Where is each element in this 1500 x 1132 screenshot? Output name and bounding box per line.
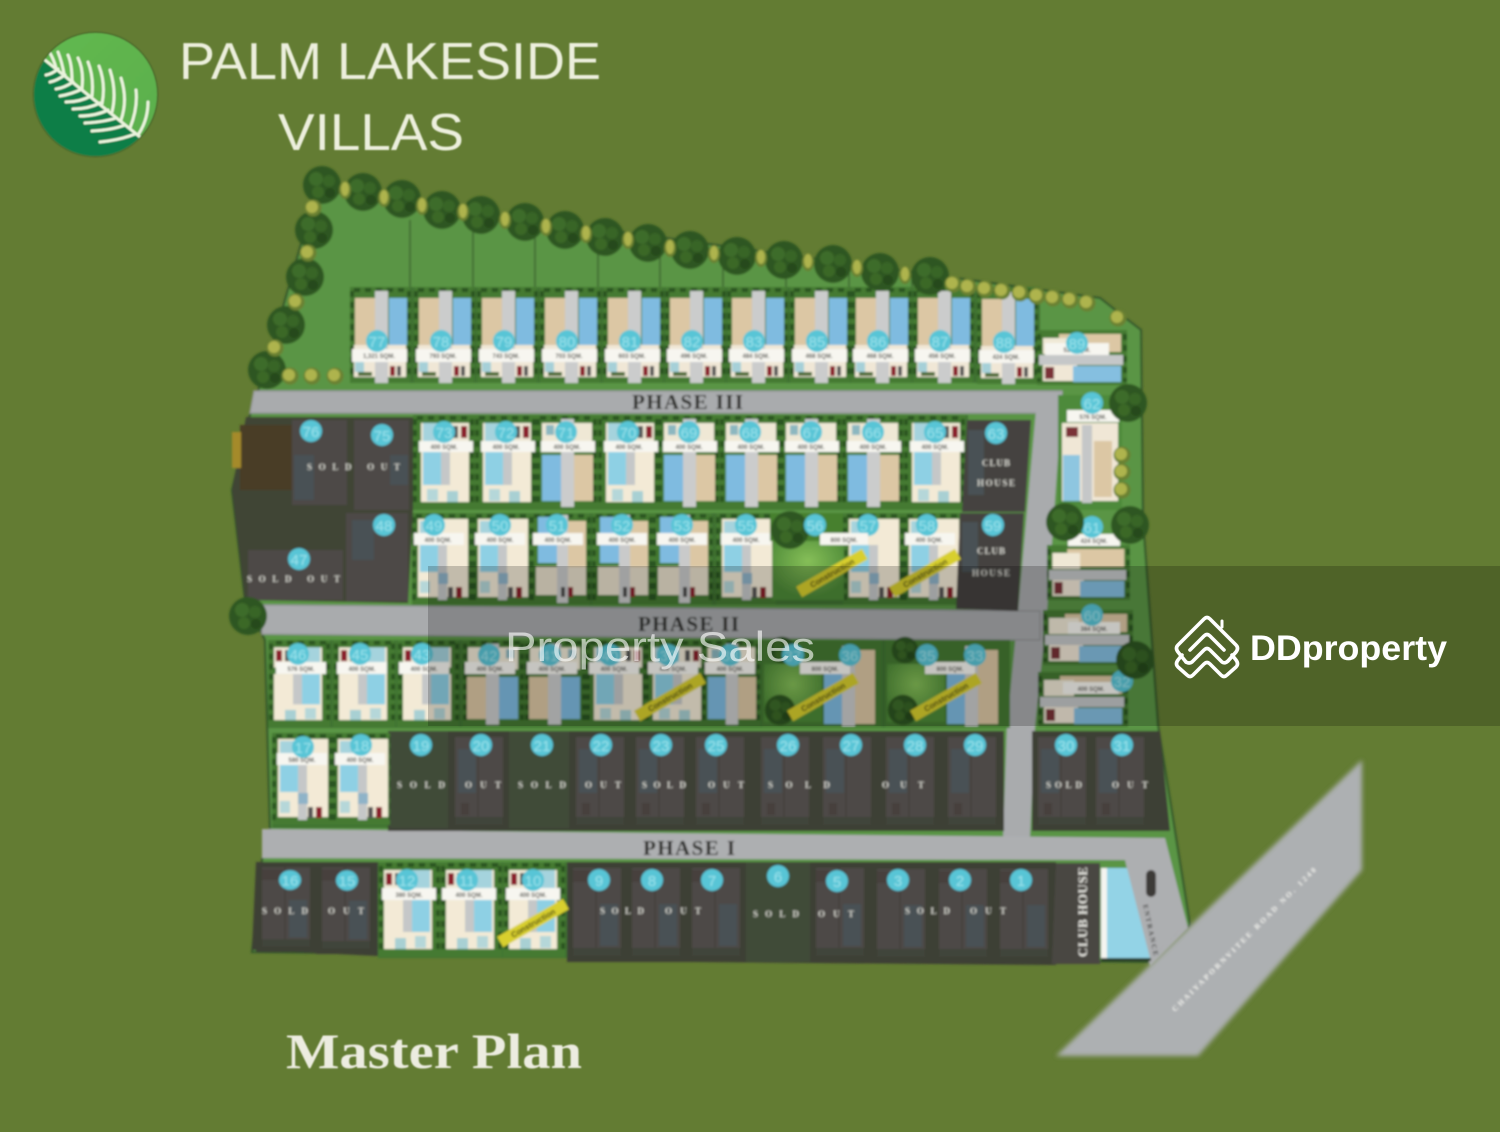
plot 80 — [540, 287, 600, 383]
plot 87: 87 — [932, 334, 948, 351]
plot 57: 57 — [860, 518, 876, 535]
plot 39: 400 SQM. — [659, 667, 687, 673]
plot 11: 11 — [459, 873, 475, 890]
plot 79: 743 SQM. — [492, 354, 520, 360]
entrance label: ENTRANCE — [1141, 904, 1160, 957]
plot 23: 23 — [653, 738, 669, 755]
plot 65 — [904, 415, 966, 510]
plot 88: 424 SQM. — [992, 355, 1020, 361]
plot 61: 61 — [1084, 520, 1100, 537]
plot 78 — [414, 287, 474, 383]
watermark text: Property Sales — [505, 623, 815, 670]
plot 52: 52 — [614, 518, 630, 535]
plot 36 and 37 with lawn: 36 — [842, 648, 858, 665]
plot 81 — [603, 287, 663, 383]
plot 12: 12 — [399, 873, 415, 890]
plot 49: 400 SQM. — [424, 538, 452, 544]
plot 56 lawn: 56 — [807, 518, 823, 535]
plot 17: 580 SQM. — [288, 758, 316, 764]
plot 55: 400 SQM. — [732, 538, 760, 544]
sold out labels — [397, 780, 1148, 790]
plot 30: 30 — [1058, 738, 1074, 755]
plot 70: 70 — [620, 425, 636, 442]
dark block — [232, 417, 413, 603]
dark row bases — [252, 731, 1160, 965]
plot 53: 53 — [674, 518, 690, 535]
plot 60: 384 SQM. — [1080, 627, 1108, 633]
construction tag — [910, 673, 982, 721]
plot 2 — [933, 863, 993, 963]
sold out labels — [262, 906, 1006, 919]
plot 32: 32 — [1114, 674, 1130, 691]
plot 43: 400 SQM. — [410, 667, 438, 673]
plot 39 — [645, 640, 707, 727]
plot 38 — [702, 640, 761, 727]
plot 77: 77 — [369, 334, 385, 351]
bottom row plots — [256, 862, 1318, 1013]
plot 15: 15 — [339, 874, 355, 890]
plot 86 — [851, 287, 911, 383]
plot 33 and 35 with lawn: 35 — [919, 648, 935, 665]
plot 7 — [686, 862, 746, 962]
sold out labels: OUT — [585, 780, 621, 790]
plot 82 — [665, 287, 725, 383]
club house 59: 59 — [985, 518, 1001, 535]
construction tag: Construction — [808, 557, 856, 590]
sold out labels: OUT — [882, 780, 924, 790]
plot 5 — [810, 862, 870, 962]
plot 72: 72 — [498, 425, 514, 442]
plot 40 — [586, 640, 648, 727]
phase III label: PHASE III — [632, 390, 743, 414]
plot 3 — [871, 863, 931, 963]
plot 18: 18 — [353, 738, 369, 755]
plot 61: 424 SQM. — [1080, 539, 1108, 545]
site lawn — [232, 190, 1190, 962]
plot boundary lines — [410, 220, 912, 290]
title — [179, 33, 601, 162]
club house 59 — [956, 513, 1024, 611]
sold out labels: OUT — [708, 780, 744, 790]
plot 11: 400 SQM. — [455, 893, 483, 899]
plot 36 and 37 with lawn: 800 SQM. — [811, 667, 839, 673]
plot 25: 25 — [708, 738, 724, 755]
plot 28 — [880, 731, 940, 831]
plot 67: 67 — [803, 425, 819, 442]
plot 73: 400 SQM. — [430, 445, 458, 451]
plot 83: 83 — [746, 334, 762, 351]
top row plots — [350, 287, 1127, 385]
right column plots — [1038, 392, 1133, 727]
plot 66: 400 SQM. — [859, 445, 887, 451]
plot 61 — [1047, 516, 1130, 600]
sold out labels: OUT — [328, 906, 364, 916]
plot 60 — [1043, 604, 1133, 665]
plot 32: 400 SQM. — [1077, 687, 1105, 693]
club house 63: 63 — [988, 426, 1004, 443]
plot 42 — [462, 640, 524, 727]
sold out labels: OUT — [818, 909, 854, 919]
plot 9: 9 — [595, 873, 603, 890]
title line 2: VILLAS — [278, 104, 464, 162]
plot 45 — [333, 640, 395, 727]
plot 19 empty — [390, 731, 448, 828]
logo: palm leaf — [32, 32, 159, 158]
sold out labels: OUT — [970, 906, 1006, 916]
plot 56 lawn — [770, 511, 868, 600]
plot 58: 400 SQM. — [915, 538, 943, 544]
plot 86: 468 SQM. — [866, 354, 894, 360]
road: vertical connector — [1003, 391, 1062, 838]
plot 70 — [598, 415, 660, 510]
plot 71: 400 SQM. — [553, 445, 581, 451]
club house 63: CLUB — [982, 458, 1010, 468]
plot 52: 400 SQM. — [608, 538, 636, 544]
plot 28: 28 — [907, 738, 923, 755]
sold out text: SOLD OUT — [307, 462, 400, 472]
plot 75: 75 — [374, 428, 390, 445]
plot 26: 26 — [780, 738, 796, 755]
plot 41: 400 SQM. — [538, 667, 566, 673]
plot 78: 78 — [433, 334, 449, 351]
sold out labels: SOLD — [518, 780, 566, 790]
sold out labels: SOLD — [768, 780, 830, 790]
DDproperty logo wordmark: DDproperty — [1250, 629, 1448, 668]
plot 25 — [690, 731, 750, 831]
plot 68: 400 SQM. — [737, 445, 765, 451]
fifth row plots — [272, 731, 1170, 831]
row base hedges — [268, 287, 1040, 958]
plot 81: 81 — [622, 334, 638, 351]
plot 76 — [300, 420, 322, 442]
sold out labels: SOLD — [753, 909, 800, 919]
construction tag: Construction — [901, 557, 949, 590]
plot 66 — [842, 415, 904, 510]
plot 27 — [817, 731, 877, 831]
plot 8: 8 — [648, 873, 656, 890]
plot 56 lawn: 800 SQM. — [830, 538, 858, 544]
sold out labels: SOLD — [642, 780, 686, 790]
club house 63 — [962, 420, 1031, 512]
plot 2: 2 — [956, 873, 964, 890]
plot 45: 400 SQM. — [348, 667, 376, 673]
plot 79 — [477, 287, 537, 383]
plot 6 empty — [746, 862, 810, 962]
club house 59: HOUSE — [972, 568, 1010, 578]
plot 55: 55 — [738, 518, 754, 535]
sold out labels: SOLD — [905, 906, 950, 916]
plot 75 — [371, 424, 393, 446]
plot 1 — [994, 863, 1054, 963]
construction tag — [889, 549, 961, 597]
plot 70: 400 SQM. — [615, 445, 643, 451]
plot 88 — [977, 288, 1037, 384]
plot 42: 42 — [481, 648, 497, 665]
plot 21 empty: 21 — [534, 738, 550, 755]
plot 68: 68 — [742, 425, 758, 442]
road: Chaiyapornvitee main road — [1056, 760, 1362, 1056]
plot 88: 88 — [996, 335, 1012, 352]
road: phase III — [250, 391, 1062, 413]
plot 50: 50 — [492, 518, 508, 535]
sold out labels: SOLD — [397, 780, 446, 790]
plot 53 — [652, 513, 712, 605]
plot 55 — [716, 513, 776, 605]
plot 10: 400 SQM. — [519, 893, 547, 899]
plot 67 — [780, 415, 842, 510]
plot 17 — [272, 733, 332, 825]
plot 82: 82 — [684, 334, 700, 351]
plot 18 — [332, 733, 392, 825]
plot 31 — [1090, 731, 1170, 831]
plot 73: 73 — [436, 425, 452, 442]
plot 48 — [373, 514, 395, 536]
road name: CHAIYAPORNVITEE ROAD NO. 1240 — [1170, 865, 1318, 1013]
plot 85 — [790, 287, 850, 383]
plot 58: 58 — [919, 518, 935, 535]
plot 50 — [472, 513, 532, 605]
plot 68 — [720, 415, 782, 510]
construction tag — [497, 899, 569, 947]
plot 77: 1,321 SQM. — [363, 354, 395, 360]
plot 46: 576 SQM. — [287, 667, 315, 673]
plot 17: 17 — [295, 740, 311, 757]
plot 22: 22 — [593, 738, 609, 755]
sold out labels: SOLD — [262, 906, 308, 916]
plot 29 — [942, 731, 1002, 831]
plot 87: 456 SQM. — [928, 354, 956, 360]
plot 11 — [440, 862, 502, 957]
plot 80: 80 — [559, 334, 575, 351]
construction tag — [634, 673, 706, 721]
plot 51: 400 SQM. — [544, 538, 572, 544]
plot 27: 27 — [843, 738, 859, 755]
plot 66: 66 — [865, 425, 881, 442]
sold-out plots: upper left — [232, 417, 413, 603]
plot 39: 39 — [660, 648, 676, 665]
plot 38: 400 SQM. — [716, 667, 744, 673]
plot 79: 79 — [496, 334, 512, 351]
road: phase I — [262, 829, 1188, 966]
plot 26 — [755, 731, 815, 831]
plot 3: 3 — [894, 873, 902, 890]
phase II label: PHASE II — [638, 612, 739, 636]
club house 63: HOUSE — [977, 478, 1015, 488]
plot 15 — [316, 862, 376, 954]
map: master plan site — [229, 166, 1362, 1056]
plot 62: 576 SQM. — [1079, 415, 1107, 421]
plot 60: 60 — [1084, 608, 1100, 625]
plot 5: 5 — [833, 874, 841, 891]
plot 43: 43 — [414, 647, 430, 664]
plot 16 — [256, 862, 316, 952]
club house plots — [956, 420, 1031, 611]
plot 12: 380 SQM. — [395, 893, 423, 899]
sold out labels: OUT — [465, 780, 501, 790]
plot 89 — [1037, 330, 1127, 385]
plot 41 — [524, 640, 586, 727]
plot 31: 31 — [1114, 738, 1130, 755]
plot 51: 51 — [549, 518, 565, 535]
plot 43 — [397, 640, 459, 727]
plot 8 — [626, 862, 686, 962]
mature trees patch — [240, 425, 292, 490]
sold out labels: SOLD — [600, 906, 644, 916]
plot 65: 65 — [927, 425, 943, 442]
tree lines — [229, 166, 1154, 679]
third row plots — [412, 511, 963, 605]
phase I label: PHASE I — [643, 836, 735, 860]
plot 33 and 35 with lawn: 33 — [967, 648, 983, 665]
construction tag: Construction — [922, 681, 970, 714]
plot 57 — [843, 513, 903, 605]
plot 69 — [658, 415, 720, 510]
plot 65: 400 SQM. — [921, 445, 949, 451]
plot 71 — [536, 415, 598, 510]
plot 73 — [413, 415, 475, 510]
plot 45: 45 — [352, 647, 368, 664]
plot 29: 29 — [967, 738, 983, 755]
plot 23 — [630, 731, 690, 831]
second row plots — [413, 415, 966, 510]
plot 58 — [903, 513, 963, 605]
plot 72 — [475, 415, 537, 510]
plot 36 and 37 with lawn — [762, 637, 882, 728]
plot 62 — [1058, 392, 1122, 510]
plot 18: 400 SQM. — [346, 758, 374, 764]
plot 78: 793 SQM. — [429, 354, 457, 360]
club house bottom: CLUB HOUSE — [1075, 867, 1090, 957]
entrance gate — [1146, 870, 1156, 897]
plot 87 — [913, 287, 973, 383]
club house pool — [1101, 868, 1151, 961]
plot 49 — [412, 513, 472, 605]
sold out labels: OUT — [665, 906, 701, 916]
plot 53: 400 SQM. — [668, 538, 696, 544]
plot 9 — [567, 862, 627, 962]
plot 30 — [1032, 731, 1092, 831]
plot 51 — [530, 513, 590, 605]
DDproperty logo icon — [1176, 618, 1238, 676]
plot 6 empty: 6 — [774, 869, 782, 886]
sold out labels: OUT — [1112, 780, 1148, 790]
plot 83 — [727, 287, 787, 383]
plot 33 and 35 with lawn — [885, 637, 1010, 728]
plot 47 — [288, 548, 310, 570]
plot 19 empty: 19 — [413, 738, 429, 755]
watermark band — [428, 566, 1500, 726]
construction tag — [796, 549, 868, 597]
plot 48: 48 — [376, 518, 392, 535]
plot 89: 520 SQM. — [1063, 348, 1091, 354]
plot 20: 20 — [473, 738, 489, 755]
plot 10: 10 — [525, 873, 541, 890]
plot 76: 76 — [303, 424, 319, 441]
plot 40: 400 SQM. — [600, 667, 628, 673]
title line 1: PALM LAKESIDE — [179, 33, 601, 91]
construction tag: Construction — [509, 907, 557, 940]
plot 86: 86 — [870, 334, 886, 351]
plot 49: 49 — [426, 518, 442, 535]
plot 20 — [449, 731, 509, 831]
plot 67: 400 SQM. — [797, 445, 825, 451]
plot 38: 38 — [722, 648, 738, 665]
plot 85: 468 SQM. — [805, 354, 833, 360]
plot 33 and 35 with lawn: 800 SQM. — [936, 667, 964, 673]
plot 22 — [570, 731, 630, 831]
plot 80: 703 SQM. — [555, 354, 583, 360]
plot 1: 1 — [1017, 873, 1025, 890]
plot 69: 400 SQM. — [675, 445, 703, 451]
plot 81: 603 SQM. — [618, 354, 646, 360]
plot 41: 41 — [542, 648, 558, 665]
construction tag: Construction — [799, 681, 847, 714]
plot 47: 47 — [291, 552, 307, 569]
plot 32 — [1038, 670, 1133, 727]
road: phase II — [262, 605, 1040, 640]
plot 77 — [350, 287, 410, 383]
plot 89: 89 — [1069, 336, 1085, 353]
plot 85: 85 — [809, 334, 825, 351]
plot 16: 16 — [282, 874, 298, 889]
plot 7: 7 — [708, 873, 716, 890]
club house bottom — [1052, 863, 1100, 964]
plot 52 — [592, 513, 652, 605]
master plan caption: Master Plan — [286, 1023, 582, 1079]
sold out text lower: SOLD OUT — [247, 574, 340, 584]
plot 40: 40 — [602, 648, 618, 665]
plot 12 — [378, 862, 440, 957]
plot 62: 62 — [1084, 396, 1100, 413]
plot 42: 400 SQM. — [476, 667, 504, 673]
construction tag — [787, 673, 859, 721]
construction tag: Construction — [646, 681, 694, 714]
plot 21 empty — [509, 731, 569, 828]
sold out labels: SOLD — [1046, 780, 1082, 790]
plot 83: 484 SQM. — [742, 354, 770, 360]
plot 46 — [268, 640, 330, 727]
plot 36 and 37 with lawn: 37 — [785, 648, 801, 665]
fourth row plots — [268, 637, 1010, 728]
plot 50: 400 SQM. — [486, 538, 514, 544]
plot 46: 46 — [290, 647, 306, 664]
club house 59: CLUB — [977, 546, 1005, 556]
plot 71: 71 — [558, 425, 574, 442]
plot 10 — [503, 862, 565, 957]
plot 69: 69 — [681, 425, 697, 442]
plot 82: 496 SQM. — [680, 354, 708, 360]
plot 72: 400 SQM. — [492, 445, 520, 451]
